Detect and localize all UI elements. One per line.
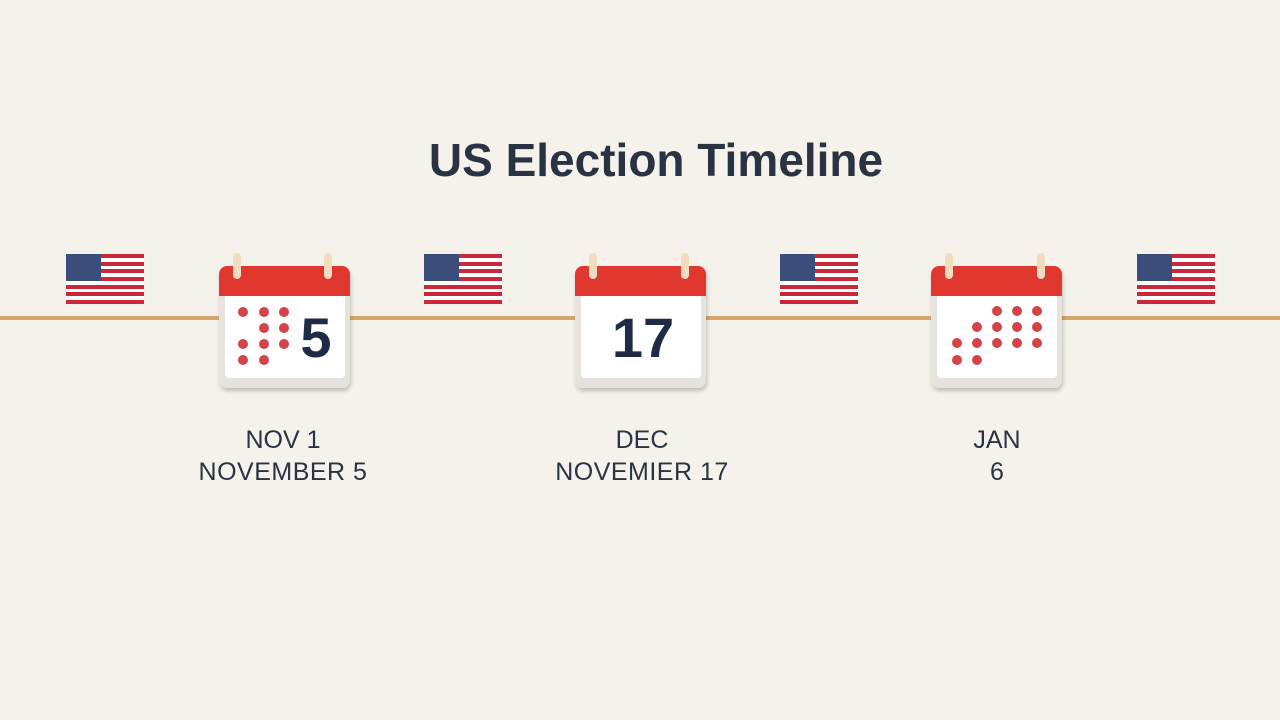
- label: nov: NOV 1: [245, 426, 321, 454]
- label: dec: [555, 426, 729, 486]
- icon: calendar 2: 17: [612, 306, 674, 369]
- label: jan: 6: [990, 458, 1004, 486]
- label: jan: [973, 426, 1021, 486]
- icon: flag 4: [1137, 254, 1215, 304]
- icon: flag 1: [66, 254, 144, 304]
- icon: calendar 2: [575, 253, 706, 388]
- label: nov: [199, 426, 367, 486]
- icon: calendar 1: 5: [300, 306, 332, 369]
- icon: flag 2: [424, 254, 502, 304]
- label: nov: NOVEMBER 5: [199, 458, 367, 486]
- label: dec: NOVEMIER 17: [555, 458, 729, 486]
- label: jan: JAN: [973, 426, 1021, 454]
- title: US Election Timeline: [429, 134, 883, 186]
- icon: calendar 3: [931, 253, 1062, 388]
- icon: calendar 1: [219, 253, 350, 388]
- icon: flag 3: [780, 254, 858, 304]
- timeline line: [0, 316, 1280, 320]
- label: dec: DEC: [616, 426, 668, 454]
